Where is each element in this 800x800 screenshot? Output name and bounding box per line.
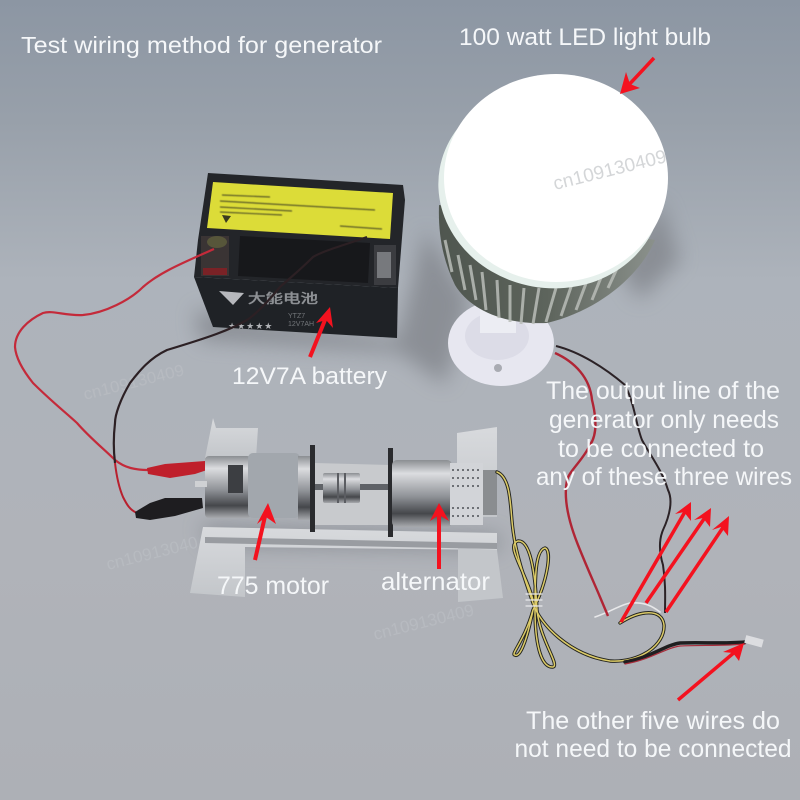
label: output line: The output line of the [546, 377, 780, 405]
arrow: other five wires [678, 643, 744, 700]
label: test wiring: Test wiring method for generator [21, 32, 382, 58]
label: other five wires [514, 707, 792, 763]
label: LED bulb: 100 watt LED light bulb [459, 24, 711, 51]
positive terminal [201, 236, 229, 276]
bulb heat sink [439, 205, 655, 324]
red clip [147, 461, 207, 478]
red wire from battery positive [15, 249, 214, 470]
yellow battery label [207, 182, 393, 239]
red arrows [255, 58, 744, 700]
watermarks on background [81, 361, 476, 644]
battery logo [219, 291, 244, 305]
harness connector [744, 635, 764, 647]
battery compartment [238, 236, 370, 283]
arrow: wire three [666, 516, 729, 612]
battery model: YTZ7 [288, 313, 305, 320]
label: output line: any of these three wires [536, 463, 792, 491]
label: other five wires: not need to be connected [514, 735, 792, 763]
bulb watermark: cn109130409 [551, 146, 669, 195]
lamp output wires [555, 346, 670, 616]
label: 775 motor: 775 motor [217, 572, 329, 600]
shaft coupling [315, 473, 390, 503]
aluminium frame [190, 418, 503, 602]
battery [194, 173, 405, 338]
arrow: to bulb [620, 58, 654, 94]
battery model [288, 313, 314, 328]
black clip [135, 498, 203, 520]
soft shadows [195, 200, 680, 550]
black wire from battery negative [114, 237, 367, 463]
label: other five wires: The other five wires do [526, 707, 780, 735]
negative terminal [374, 245, 396, 285]
alternator [388, 448, 497, 537]
battery model: 12V7AH [288, 321, 314, 328]
watermarks on background: cn109130409 [81, 361, 186, 404]
glowing bulb dome [422, 70, 678, 306]
label: output line [536, 377, 792, 491]
watermarks on background: cn10913040 [104, 533, 200, 574]
arrow: to motor [255, 503, 276, 560]
arrow: wire two [646, 508, 711, 603]
bulb stand [448, 300, 554, 386]
battery brand text: 大能电池 [248, 291, 318, 306]
arrow: to battery [310, 307, 333, 357]
battery top [194, 173, 405, 288]
label: alternator: alternator [381, 568, 490, 596]
label: battery: 12V7A battery [232, 363, 388, 390]
battery front [194, 277, 398, 338]
arrow: to alternator [430, 503, 449, 569]
label: output line: to be connected to [558, 435, 764, 463]
label: output line: generator only needs [549, 406, 779, 434]
775 motor [195, 445, 315, 532]
watermarks on background: cn109130409 [371, 601, 476, 644]
generator wiring harness [497, 472, 745, 667]
battery stars: ★★★★★ [228, 321, 273, 331]
arrow: wire one [621, 502, 691, 622]
